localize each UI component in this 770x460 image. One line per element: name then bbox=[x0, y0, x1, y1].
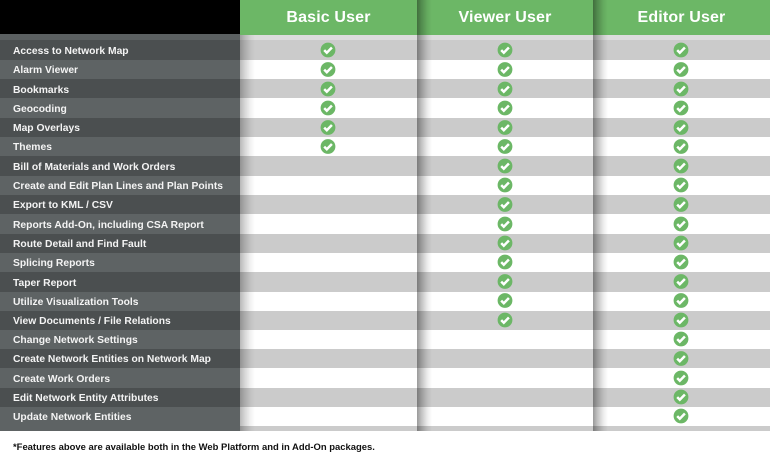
label: Reports Add-On, including CSA Report: Reports Add-On, including CSA Report bbox=[13, 220, 204, 231]
column heading: Editor User: Editor User bbox=[638, 9, 725, 26]
label: Export to KML / CSV: Export to KML / CSV bbox=[13, 200, 113, 211]
label: Bill of Materials and Work Orders: Bill of Materials and Work Orders bbox=[13, 162, 175, 173]
label: Update Network Entities: Update Network Entities bbox=[13, 412, 131, 423]
Viewer User checks bbox=[498, 43, 512, 327]
label: Splicing Reports bbox=[0, 253, 240, 272]
footnote: *Features above are available both in the Web Platform and in Add-On packages. bbox=[13, 442, 375, 453]
label: Themes: Themes bbox=[13, 142, 52, 153]
column heading: Viewer User: Viewer User bbox=[458, 9, 551, 26]
label: Splicing Reports: Splicing Reports bbox=[13, 258, 95, 269]
label: Update Network Entities bbox=[0, 407, 240, 426]
header corner block bbox=[0, 0, 240, 34]
label: Create Network Entities on Network Map: Create Network Entities on Network Map bbox=[13, 354, 211, 365]
label: Create Network Entities on Network Map bbox=[0, 349, 240, 368]
label: Bill of Materials and Work Orders bbox=[0, 156, 240, 176]
label: Utilize Visualization Tools: Utilize Visualization Tools bbox=[13, 297, 138, 308]
label: Edit Network Entity Attributes bbox=[0, 388, 240, 407]
header band under corner bbox=[0, 34, 240, 40]
label: Bookmarks: Bookmarks bbox=[13, 85, 69, 96]
label: Map Overlays bbox=[0, 118, 240, 137]
column heading: Basic User: Basic User bbox=[286, 9, 371, 26]
label: Taper Report: Taper Report bbox=[13, 278, 76, 289]
label: Themes bbox=[0, 137, 240, 156]
column heading: Editor User bbox=[593, 0, 770, 35]
label: Route Detail and Find Fault bbox=[0, 234, 240, 253]
label: Change Network Settings: Change Network Settings bbox=[13, 335, 138, 346]
label: Taper Report bbox=[0, 272, 240, 292]
label: Bookmarks bbox=[0, 79, 240, 98]
label: Utilize Visualization Tools bbox=[0, 292, 240, 311]
label: Create and Edit Plan Lines and Plan Points bbox=[0, 176, 240, 195]
label: Access to Network Map bbox=[0, 40, 240, 60]
Editor User checks bbox=[674, 43, 688, 423]
band under column headers bbox=[240, 35, 770, 40]
label: Create and Edit Plan Lines and Plan Points: Create and Edit Plan Lines and Plan Points bbox=[13, 181, 223, 192]
label: Alarm Viewer bbox=[0, 60, 240, 79]
column heading: Basic User bbox=[240, 0, 417, 35]
label: Geocoding bbox=[0, 98, 240, 118]
feature labels column bbox=[0, 40, 240, 431]
label: Create Work Orders: Create Work Orders bbox=[13, 374, 110, 385]
label: Map Overlays: Map Overlays bbox=[13, 123, 80, 134]
label: Geocoding: Geocoding bbox=[13, 104, 67, 115]
label: Route Detail and Find Fault: Route Detail and Find Fault bbox=[13, 239, 146, 250]
column shadows bbox=[240, 0, 606, 431]
Basic User checks bbox=[321, 43, 335, 154]
column heading: Viewer User bbox=[417, 0, 593, 35]
label: Access to Network Map: Access to Network Map bbox=[13, 46, 129, 57]
label: Edit Network Entity Attributes: Edit Network Entity Attributes bbox=[13, 393, 158, 404]
label: Export to KML / CSV bbox=[0, 195, 240, 214]
label: View Documents / File Relations: View Documents / File Relations bbox=[13, 316, 171, 327]
label: Alarm Viewer: Alarm Viewer bbox=[13, 65, 78, 76]
label: View Documents / File Relations bbox=[0, 311, 240, 330]
label: Create Work Orders bbox=[0, 368, 240, 388]
label: Change Network Settings bbox=[0, 330, 240, 349]
label: Reports Add-On, including CSA Report bbox=[0, 214, 240, 234]
